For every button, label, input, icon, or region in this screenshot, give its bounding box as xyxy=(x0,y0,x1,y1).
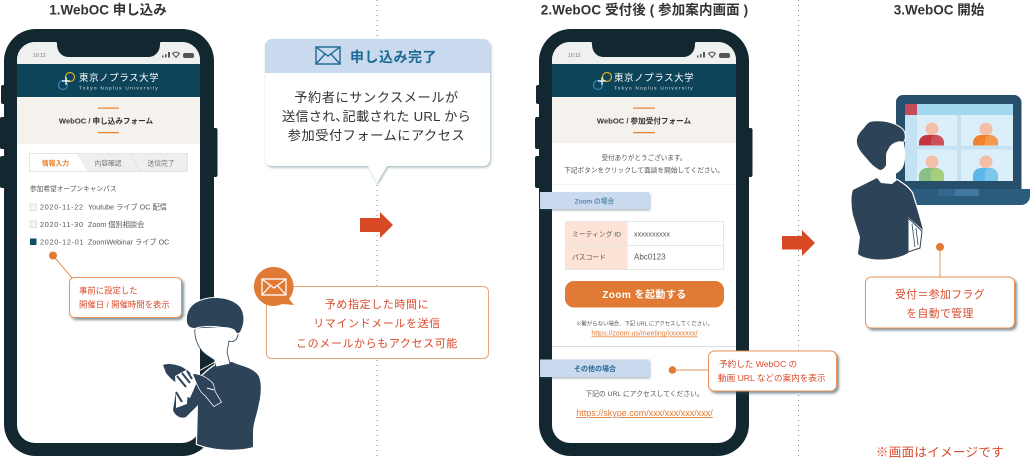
phone 2 body xyxy=(539,29,749,456)
label: Zoom case xyxy=(540,192,649,209)
callout: video URL: 予約した WebOC の xyxy=(719,358,797,369)
icon: mail bubble xyxy=(254,267,294,306)
callout: video URL: 動画 URL などの案内を表示 xyxy=(718,372,826,383)
right hand xyxy=(193,374,221,406)
other-case text: 下記の URL にアクセスしてください。 xyxy=(585,390,704,398)
label: other case: その他の場合 xyxy=(574,364,616,373)
neck and face xyxy=(195,326,238,367)
phone 1 xyxy=(0,29,218,456)
bubble: application complete: 参加受付フォームにアクセス xyxy=(288,128,465,143)
phone 1 body xyxy=(4,29,214,456)
heading: step 3: 3.WebOC 開始 xyxy=(894,2,985,18)
form list: Zoom 個別相談会 xyxy=(88,220,144,229)
form list: 2020-11-30 xyxy=(40,220,84,229)
note: ※画面はイメージです xyxy=(876,446,1004,460)
person with smartphone xyxy=(163,298,261,450)
progress tabs: 送信完了 xyxy=(147,158,175,168)
body xyxy=(173,362,261,450)
university logo: 東京ノプラス大学 xyxy=(79,72,159,84)
video participants xyxy=(919,122,998,181)
zoom button: Zoom を起動する xyxy=(602,288,687,301)
hand xyxy=(908,218,922,252)
callout: event date: 開催日 / 開催時間を表示 xyxy=(79,300,170,310)
callout: auto flag xyxy=(866,243,1014,328)
university banner xyxy=(552,64,736,97)
dotted divider lines xyxy=(377,0,798,460)
form list: ZoomWebinar ライブ OC xyxy=(88,238,169,246)
label: other case xyxy=(540,360,649,377)
phone 1 side buttons xyxy=(0,85,218,188)
callout: video URL xyxy=(669,351,836,391)
university banner xyxy=(17,64,200,97)
phone 2 screen: 下記ボタンをクリックして面談を開始してください。 xyxy=(564,166,724,174)
university logo: Tokyo Noplus University xyxy=(614,86,694,92)
reminder mail callout: このメールからもアクセス可能 xyxy=(296,336,458,350)
form list xyxy=(30,184,169,246)
bubble: application complete: 申し込み完了 xyxy=(350,49,437,65)
bubble: application complete: 送信され､記載された URL から xyxy=(282,109,471,124)
form title band xyxy=(17,97,200,144)
form title band xyxy=(552,97,736,143)
phone 1 screen: WebOC / 申し込みフォーム xyxy=(59,116,153,126)
zoom info table: Abc0123 xyxy=(634,252,666,262)
hair xyxy=(187,298,243,333)
university logo xyxy=(594,72,694,92)
phone 2 side buttons xyxy=(535,85,752,188)
icon: envelope xyxy=(316,47,340,64)
zoom fallback note: ※繋がらない場合、下記 URL にアクセスしてください。 xyxy=(576,320,713,328)
phone 2 xyxy=(535,29,752,456)
thank-you text: 受付ありがとうございます。 xyxy=(601,153,687,162)
laptop lid xyxy=(896,95,1022,189)
zoom info table: ミーティング ID xyxy=(572,230,621,238)
bubble: application complete: 予約者にサンクスメールが xyxy=(294,90,459,105)
phone 2 screen xyxy=(552,41,736,443)
zoom button xyxy=(565,281,724,308)
laptop with video call xyxy=(896,95,1030,205)
bubble body xyxy=(265,39,490,183)
zoom info table: xxxxxxxxxx xyxy=(634,230,670,238)
phone 2 screen: https://skype.com/xxx/xxx/xxx/xxx/ xyxy=(576,408,713,418)
callout: event date: 事前に設定した xyxy=(79,286,138,296)
form list: 2020-12-01 xyxy=(40,238,84,246)
callout: auto flag: 受付＝参加フラグ xyxy=(895,287,985,301)
body xyxy=(852,178,923,260)
university logo: 東京ノプラス大学 xyxy=(614,72,694,84)
arrow 2 xyxy=(782,230,815,256)
reminder mail callout: 予め指定した時間に xyxy=(325,297,429,311)
reminder mail callout: リマインドメールを送信 xyxy=(313,316,441,330)
university logo xyxy=(58,72,159,92)
label: Zoom case: Zoom の場合 xyxy=(575,196,615,206)
progress tabs xyxy=(30,154,188,172)
form list: Youtube ライブ OC 配信 xyxy=(88,202,167,212)
phone 2 screen: https://zoom.us/meeting/xxxxxxxx/ xyxy=(591,330,698,338)
screen xyxy=(905,104,1013,181)
phone 2 screen: WebOC / 参加受付フォーム xyxy=(597,116,691,126)
left hand xyxy=(175,370,193,408)
arrow 1 xyxy=(360,212,393,238)
heading: step 1: 1.WebOC 申し込み xyxy=(49,2,167,18)
callout: event date xyxy=(49,252,182,318)
smartphone in hand xyxy=(163,364,191,386)
reminder mail callout xyxy=(254,267,488,358)
phone 2 screen: 10:12 xyxy=(568,53,581,59)
callout: auto flag: を自動で管理 xyxy=(906,306,974,320)
form list: 2020-11-22 xyxy=(40,202,84,212)
person at laptop xyxy=(852,121,923,260)
bubble: application complete xyxy=(265,39,490,183)
zoom info table xyxy=(566,222,724,270)
face and neck xyxy=(878,140,905,183)
heading: step 2: 2.WebOC 受付後 ( 参加案内画面 ) xyxy=(541,2,748,18)
progress tabs: 情報入力 xyxy=(42,158,69,168)
form list: 参加希望オープンキャンパス xyxy=(30,184,117,193)
university logo: Tokyo Noplus University xyxy=(79,86,159,92)
zoom info table: パスコード xyxy=(572,254,606,262)
phone 1 screen xyxy=(17,41,200,443)
laptop base xyxy=(900,189,1030,205)
progress tabs: 内容確認 xyxy=(94,158,122,168)
phone 1 screen: 10:12 xyxy=(33,53,46,59)
hair xyxy=(857,121,905,170)
bubble header xyxy=(265,39,490,73)
